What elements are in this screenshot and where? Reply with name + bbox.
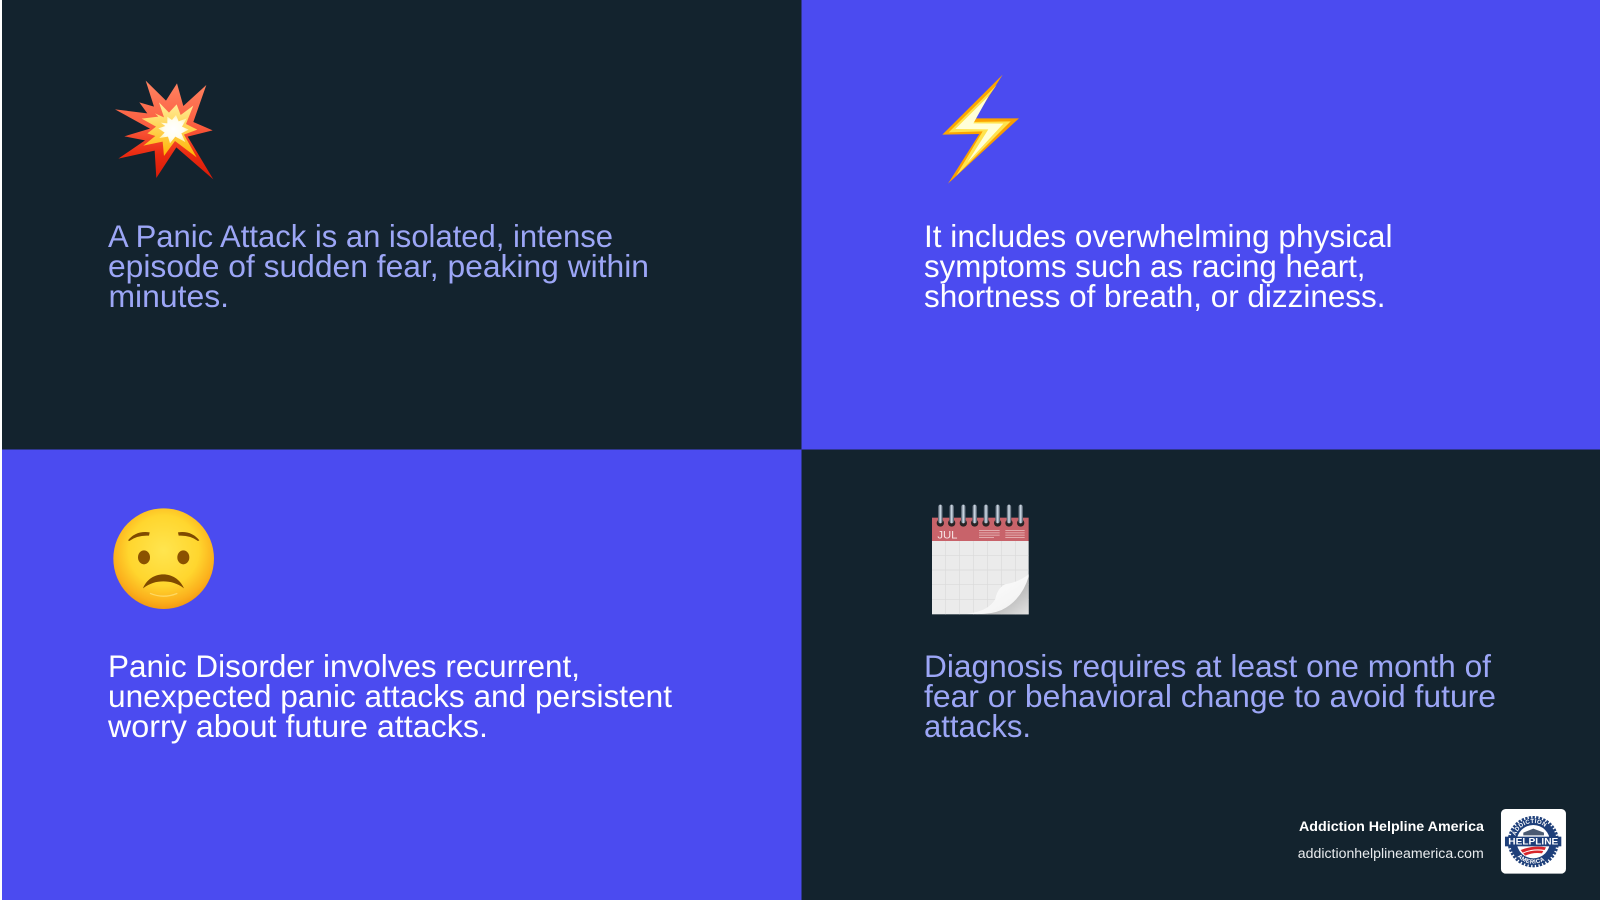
text: panic attack definition: A Panic Attack is an isolated, intense [108, 218, 613, 254]
panel: physical symptoms [802, 0, 1600, 450]
text: panic attack definition [108, 218, 649, 314]
text: diagnosis criteria: Diagnosis requires at least one month of [924, 648, 1491, 684]
text: physical symptoms: symptoms such as racing heart, [924, 248, 1366, 284]
text: diagnosis criteria: fear or behavioral change to avoid future [924, 678, 1496, 714]
logo: helpline badge: AMERICA [1517, 854, 1544, 864]
logo: helpline badge [1500, 809, 1566, 874]
text: panic disorder definition: worry about future attacks. [107, 708, 488, 744]
text: physical symptoms: It includes overwhelming physical [924, 218, 1392, 254]
text: brand url: addictionhelplineamerica.com [1298, 846, 1484, 861]
text: brand name: Addiction Helpline America [1299, 819, 1485, 834]
text: panic disorder definition [107, 648, 672, 744]
icon: spiral calendar [932, 505, 1029, 614]
brand footer [1298, 809, 1566, 874]
text: panic disorder definition: Panic Disorder involves recurrent, [108, 648, 580, 684]
text: physical symptoms: shortness of breath, or dizziness. [924, 278, 1386, 314]
icon: spiral calendar: JUL [937, 530, 957, 542]
text: diagnosis criteria: attacks. [924, 708, 1031, 744]
icon: lightning bolt [942, 75, 1019, 184]
text: panic attack definition: episode of sudden fear, peaking within [108, 248, 649, 284]
panel: diagnosis criteria [802, 450, 1600, 900]
logo: helpline badge: HELPLINE [1508, 837, 1558, 847]
icon: worried face [113, 508, 214, 609]
text: physical symptoms [924, 218, 1392, 314]
logo: helpline badge: ADDICTION [1512, 818, 1547, 836]
icon: collision explosion [115, 81, 213, 179]
panel: panic attack definition [2, 0, 802, 450]
text: panic attack definition: minutes. [108, 278, 229, 314]
panel: panic disorder definition [2, 450, 802, 900]
text: panic disorder definition: unexpected panic attacks and persistent [108, 678, 672, 714]
text: diagnosis criteria [924, 648, 1496, 744]
